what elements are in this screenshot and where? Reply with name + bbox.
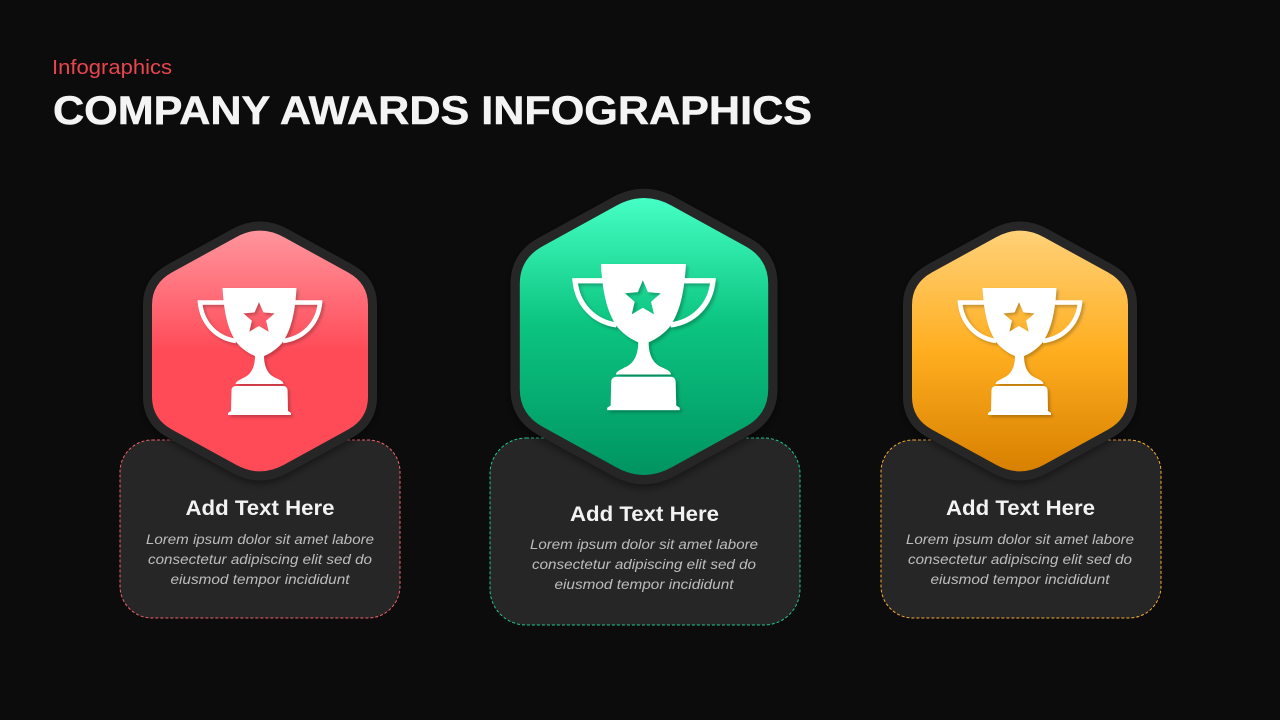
card body text: eiusmod tempor incididunt xyxy=(930,572,1111,587)
card body text: Lorem ipsum dolor sit amet labore xyxy=(146,532,374,547)
card body text: consectetur adipiscing elit sed do xyxy=(148,552,373,567)
card body text xyxy=(906,532,1134,587)
card body text xyxy=(146,532,374,587)
title: COMPANY AWARDS INFOGRAPHICS xyxy=(53,89,812,133)
card body text xyxy=(530,537,758,592)
hexagon badge: red xyxy=(152,231,368,471)
text card: red xyxy=(120,440,400,618)
hexagon badge: orange xyxy=(912,231,1128,471)
card body text: eiusmod tempor incididunt xyxy=(554,577,735,592)
icon: trophy xyxy=(200,288,320,415)
card body text: consectetur adipiscing elit sed do xyxy=(532,557,757,572)
card heading: Add Text Here xyxy=(186,497,334,520)
card heading: Add Text Here xyxy=(946,497,1095,520)
card body text: eiusmod tempor incididunt xyxy=(170,572,351,587)
card body text: Lorem ipsum dolor sit amet labore xyxy=(530,537,758,552)
panel: orange award xyxy=(881,231,1161,618)
icon: trophy xyxy=(575,264,713,410)
panel: red award xyxy=(120,231,400,618)
text card: green xyxy=(490,438,800,625)
card body text: consectetur adipiscing elit sed do xyxy=(908,552,1133,567)
card body text: Lorem ipsum dolor sit amet labore xyxy=(906,532,1134,547)
hexagon badge: green xyxy=(520,198,768,475)
text card: orange xyxy=(881,440,1161,618)
card heading: Add Text Here xyxy=(570,503,719,526)
panel: green award xyxy=(490,198,800,625)
icon: trophy xyxy=(960,288,1080,415)
subtitle: Infographics xyxy=(52,57,172,79)
